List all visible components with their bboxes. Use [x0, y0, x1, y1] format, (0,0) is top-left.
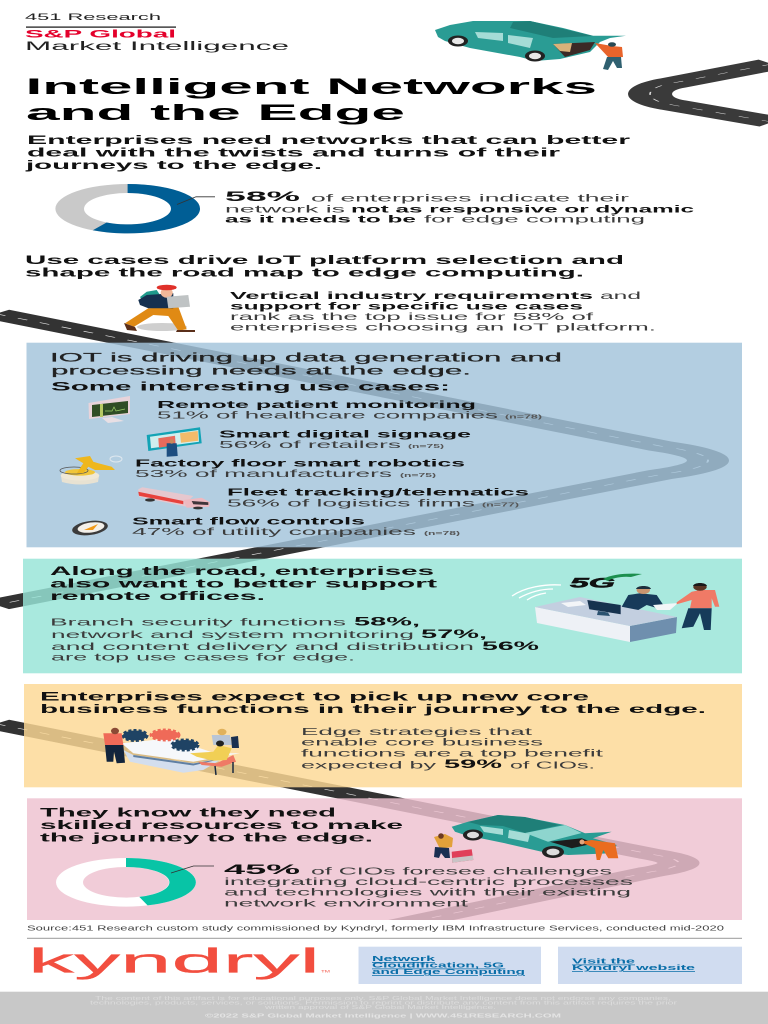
title: Intelligent Networks: [26, 74, 597, 99]
link button: Network Cloudification: Network: [372, 954, 437, 963]
intro heading: [24, 133, 631, 172]
chart: 58% donut: [55, 184, 215, 233]
section heading: use cases: [25, 253, 624, 280]
stat: 58% of enterprises: 58%: [225, 189, 300, 204]
use case: smart flow controls: Smart flow controls: [132, 515, 365, 527]
panel heading: [40, 690, 706, 716]
icon: flow gauge: [71, 519, 109, 537]
footer: written approval of S&P Global Market Intelligence.: [265, 1005, 496, 1011]
panel copy: network and system monitoring: [51, 629, 414, 641]
copy: vertical industry requirements: Vertical industry requirements: [230, 290, 593, 302]
panel copy: are top use cases for edge.: [51, 651, 355, 663]
stat: 58% of enterprises: of enterprises indicate their: [311, 193, 630, 205]
road: lower zigzag: [0, 724, 678, 924]
panel copy: enable core business: [301, 737, 543, 749]
road: top right bend: [650, 64, 768, 122]
intro heading: deal with the twists and turns of their: [27, 146, 561, 160]
panel heading: remote offices.: [50, 589, 265, 603]
road: upper zigzag: [0, 314, 708, 605]
use case: smart flow controls: [132, 515, 460, 538]
panel copy: Edge strategies that: [301, 726, 532, 738]
header logo: 451 Research / S&P Global: 451 Research: [25, 12, 161, 23]
panel copy: 59%: [444, 759, 502, 771]
use case: smart flow controls: 47% of utility companies: [132, 526, 416, 538]
panel heading: skilled resources to make: [40, 818, 404, 832]
use case: remote patient monitoring: [157, 399, 542, 422]
use case: fleet tracking: [227, 487, 529, 509]
icon: robot arm: [60, 456, 122, 484]
copy: vertical industry requirements: support for specific use cases: [230, 300, 583, 312]
panel copy: [301, 726, 603, 771]
chart: 45% donut: [56, 858, 214, 907]
logo: Kyndryl: [28, 943, 330, 981]
icon: broken-down car with mechanic and traveller: [434, 815, 618, 863]
copy: vertical industry requirements: and: [600, 290, 641, 302]
link button: Network Cloudification: and Edge Computing: [372, 967, 526, 976]
use case: fleet tracking: (n=77): [482, 502, 519, 508]
intro heading: Enterprises need networks that can better: [27, 133, 631, 147]
icon: fleet truck: [138, 487, 210, 509]
panel heading: the journey to the edge.: [40, 831, 373, 845]
stat: 45% of CIOs: and technologies with their existing: [224, 887, 631, 899]
link button: Network Cloudification: [358, 947, 541, 984]
icon: 5G desk with two people: [512, 574, 719, 642]
panel copy: 56%: [482, 641, 539, 653]
stat: 45% of CIOs: of CIOs foresee challenges: [311, 865, 612, 877]
use case: smart digital signage: Smart digital signage: [219, 428, 471, 440]
panel copy: [50, 617, 539, 663]
logo: Kyndryl: kyndryl: [28, 943, 320, 981]
stat: 45% of CIOs: 45%: [224, 862, 300, 877]
footer: [0, 992, 768, 1024]
use case: factory floor smart robotics: Factory floor smart robotics: [135, 457, 465, 469]
use case: remote patient monitoring: Remote patient monitoring: [157, 399, 476, 411]
icon: walker with map: [124, 285, 195, 332]
panel copy: 58%,: [354, 617, 420, 629]
stat: 58% of enterprises: as it needs to be: [225, 214, 416, 226]
stat: 45% of CIOs: integrating cloud-centric processes: [224, 876, 633, 888]
title: and the Edge: [26, 100, 405, 125]
icon: digital signage: [147, 427, 202, 457]
stat: 45% of CIOs: [224, 862, 633, 909]
link button: Visit the Kyndryl website: Kyndryl website: [572, 963, 695, 972]
section heading: use cases: Use cases drive IoT platform selection and: [25, 253, 624, 267]
use case: fleet tracking: Fleet tracking/telematics: [227, 487, 529, 499]
use case: factory floor smart robotics: [135, 457, 465, 480]
footer: ©2022 S&P Global Market Intelligence | WWW.451RESEARCH.COM: [205, 1013, 562, 1020]
copy: vertical industry requirements: [230, 290, 656, 334]
footer: technologies, products, services, or solutions. Permission to reprint or distribute any content from this artifact requires the prior: [90, 1000, 678, 1006]
use case: smart digital signage: (n=75): [408, 444, 444, 450]
panel heading: IOT is driving up data generation and: [50, 353, 562, 365]
stat: 58% of enterprises: [225, 189, 694, 226]
icon: 5G desk with two people: 5G: [570, 576, 616, 591]
panel: skilled resources: [27, 798, 742, 920]
link button: Visit the Kyndryl website: Visit the: [572, 956, 635, 966]
panel heading: [50, 564, 437, 603]
use case: factory floor smart robotics: 53% of manufacturers: [135, 468, 392, 480]
use case: smart digital signage: 56% of retailers: [219, 439, 401, 451]
use case: smart flow controls: (n=78): [424, 531, 460, 537]
stat: 58% of enterprises: for edge computing: [424, 214, 645, 226]
source note: Source:451 Research custom study commissioned by Kyndryl, formerly IBM Infrastructure Services, conducted mid-2020: [27, 926, 724, 933]
copy: vertical industry requirements: rank as the top issue for 58% of: [230, 311, 593, 323]
panel copy: of CIOs.: [510, 759, 595, 771]
use case: factory floor smart robotics: (n=75): [400, 473, 436, 479]
panel heading: Some interesting use cases:: [51, 382, 450, 394]
section heading: use cases: shape the road map to edge computing.: [25, 266, 584, 280]
copy: vertical industry requirements: enterprises choosing an IoT platform.: [230, 322, 656, 334]
stat: 58% of enterprises: network is: [225, 203, 345, 215]
use case: remote patient monitoring: 51% of healthcare companies: [157, 410, 498, 422]
title: [26, 74, 597, 125]
panel: remote offices: [23, 559, 742, 673]
panel heading: Along the road, enterprises: [50, 564, 435, 578]
panel heading: [40, 806, 404, 845]
panel heading: business functions in their journey to the edge.: [40, 702, 706, 716]
icon: teal car with open boot and person: [435, 21, 626, 70]
stat: 58% of enterprises: not as responsive or dynamic: [351, 203, 694, 215]
panel heading: They know they need: [40, 806, 336, 820]
link button: Network Cloudification: Cloudification, 5G: [372, 960, 504, 970]
panel heading: processing needs at the edge.: [51, 366, 471, 378]
icon: team around table with gears: [103, 728, 240, 775]
panel: IoT use cases: [26, 343, 742, 547]
header logo: 451 Research / S&P Global: Market Intelligence: [25, 41, 289, 53]
footer: The content of this artifact is for educational purposes only. S&P Global Market Intelligence does not endorse any companies,: [95, 996, 671, 1002]
panel heading: Enterprises expect to pick up new core: [40, 690, 590, 704]
panel copy: functions are a top benefit: [301, 747, 603, 759]
logo: Kyndryl: TM: [321, 970, 330, 974]
panel heading: [50, 353, 562, 394]
intro heading: journeys to the edge.: [24, 158, 322, 172]
panel copy: 57%,: [421, 629, 487, 641]
panel copy: and content delivery and distribution: [51, 641, 474, 653]
use case: remote patient monitoring: (n=78): [505, 415, 542, 421]
header logo: 451 Research / S&P Global: [25, 12, 289, 53]
panel copy: Branch security functions: [50, 617, 346, 629]
stat: 45% of CIOs: network environment: [224, 897, 468, 909]
panel copy: expected by: [301, 759, 438, 771]
icon: patient monitor: [88, 396, 130, 423]
use case: smart digital signage: [219, 428, 471, 451]
panel heading: also want to better support: [50, 576, 437, 590]
use case: fleet tracking: 56% of logistics firms: [227, 497, 475, 509]
panel: core business functions: [24, 684, 742, 787]
link button: Visit the Kyndryl website: [558, 947, 742, 984]
header logo: 451 Research / S&P Global: S&P Global: [25, 29, 176, 41]
